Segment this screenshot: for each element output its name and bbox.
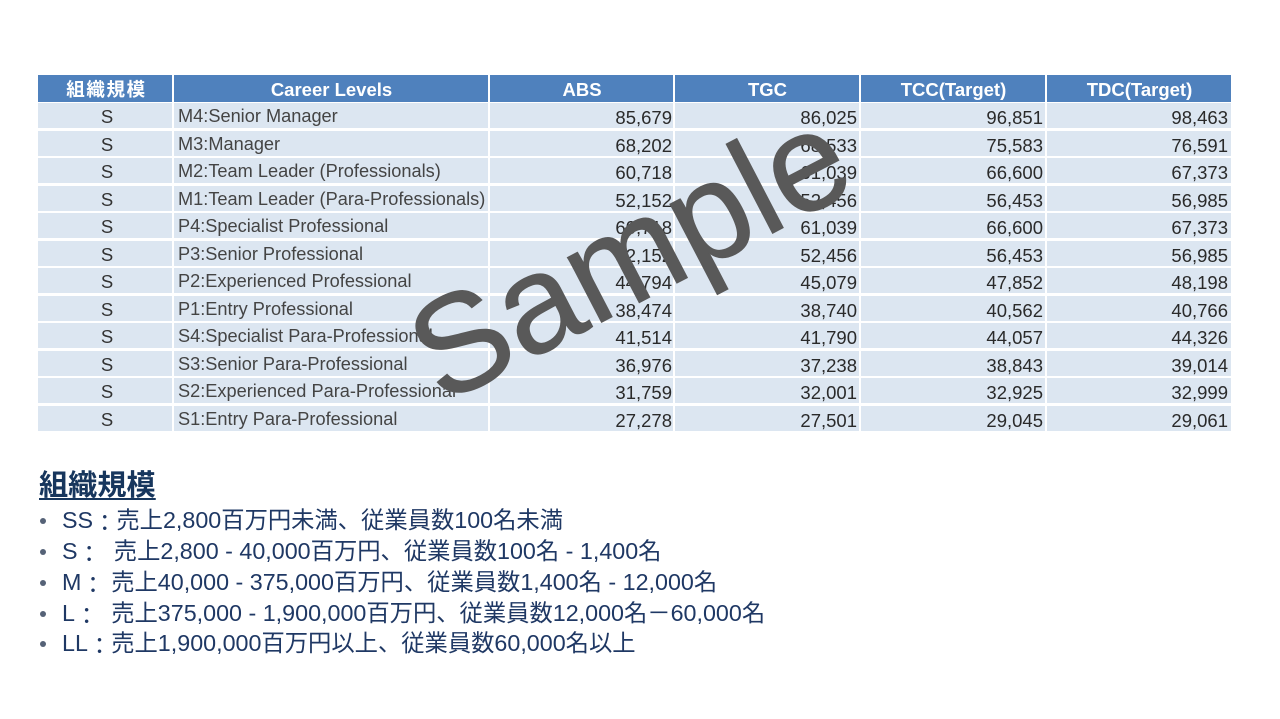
row: S1 <box>38 406 1231 431</box>
row: P3: 56,453 <box>986 244 1043 266</box>
row: S4: 44,057 <box>986 327 1043 348</box>
row: S1: S <box>101 408 113 430</box>
row: P1: 40,766 <box>1171 300 1228 320</box>
row: S3: S <box>101 354 113 374</box>
row: S1: 29,045 <box>986 410 1043 430</box>
table header row: Career Levels <box>271 79 392 100</box>
row: P4: P4:Specialist Professional <box>178 216 388 236</box>
row: P3: 56,985 <box>1171 244 1228 266</box>
row: P2 <box>38 268 1231 293</box>
row: M3: 75,583 <box>986 134 1043 156</box>
row: M3 <box>38 131 1231 156</box>
row: M3: 68,202 <box>615 134 672 156</box>
row: S2: 31,759 <box>615 382 672 403</box>
row: S4: 41,790 <box>800 327 857 348</box>
row: S1: S1:Entry Para-Professional <box>178 408 397 428</box>
row: M2: 60,718 <box>615 162 672 183</box>
row: P2: S <box>101 271 113 292</box>
row: M2: 61,039 <box>800 162 857 183</box>
row: S1: 27,278 <box>615 410 672 430</box>
row: P4 <box>38 213 1231 238</box>
row: M4 <box>38 103 1231 128</box>
row: P1: P1:Entry Professional <box>178 298 353 318</box>
row: P1: 40,562 <box>986 300 1043 320</box>
row: S4: 44,326 <box>1171 327 1228 348</box>
list item: L: L： 売上375,000 - 1,900,000百万円、従業員数12,000名－60,000名 <box>62 600 765 629</box>
list item: S: S： 売上2,800 - 40,000百万円、従業員数100名 - 1,400名 <box>62 538 661 567</box>
table header row: TDC(Target) <box>1087 79 1192 100</box>
row: M3: M3:Manager <box>178 134 280 154</box>
row: P4: S <box>101 216 113 237</box>
table header row: 組織規模 <box>66 79 147 100</box>
row: P4: 67,373 <box>1171 217 1228 238</box>
row: P2: 44,794 <box>615 272 672 293</box>
row: S4: S4:Specialist Para-Professional <box>178 326 433 346</box>
row: M4: S <box>101 106 113 127</box>
table header row: TCC(Target) <box>901 79 1006 100</box>
row: M2: M2:Team Leader (Professionals) <box>178 161 441 181</box>
row: M3: 76,591 <box>1171 134 1228 156</box>
row: M2: S <box>101 161 113 182</box>
row: P3: 52,152 <box>615 244 672 266</box>
watermark: Sample: Sample <box>384 77 874 432</box>
row: P2: 47,852 <box>986 272 1043 293</box>
row: P3: S <box>101 244 113 264</box>
row: S4: S <box>101 326 113 347</box>
row: M4: M4:Senior Manager <box>178 106 338 126</box>
row: P2: 48,198 <box>1171 272 1228 293</box>
row: S3 <box>38 351 1231 376</box>
table header row <box>38 75 1231 102</box>
row: S2: S <box>101 381 113 402</box>
list item: SS: SS：売上2,800百万円未満、従業員数100名未満 <box>62 507 563 536</box>
row: M1: M1:Team Leader (Para-Professionals) <box>178 188 485 208</box>
row: P3 <box>38 241 1231 266</box>
row: M1: 52,456 <box>800 190 857 210</box>
text block: organization size definitions <box>40 507 765 659</box>
row: S2: 32,999 <box>1171 382 1228 403</box>
row: P4: 61,039 <box>800 217 857 238</box>
row: S3: 39,014 <box>1171 354 1228 376</box>
row: P1 <box>38 296 1231 321</box>
row: P1: S <box>101 298 113 320</box>
row: P3: P3:Senior Professional <box>178 244 363 264</box>
row: S3: 36,976 <box>615 354 672 376</box>
row: M4: 85,679 <box>615 107 672 128</box>
row: S2: S2:Experienced Para-Professional <box>178 381 456 401</box>
row: P1: 38,740 <box>800 300 857 320</box>
row: S3: 37,238 <box>800 354 857 376</box>
row: S1: 29,061 <box>1171 410 1228 430</box>
row: S3: S3:Senior Para-Professional <box>178 354 407 374</box>
row: P3: 52,456 <box>800 244 857 266</box>
row: M4: 86,025 <box>800 107 857 128</box>
row: M2: 66,600 <box>986 162 1043 183</box>
row: S2: 32,925 <box>986 382 1043 403</box>
row: P4: 66,600 <box>986 217 1043 238</box>
row: S2: 32,001 <box>800 382 857 403</box>
row: M2: 67,373 <box>1171 162 1228 183</box>
row: M4: 96,851 <box>986 107 1043 128</box>
row: P4: 60,718 <box>615 217 672 238</box>
row: S4 <box>38 323 1231 348</box>
row: S1: 27,501 <box>800 410 857 430</box>
list item: M: M： 売上40,000 - 375,000百万円、従業員数1,400名 - 12,000名 <box>62 569 717 598</box>
table header row: TGC <box>748 79 787 100</box>
row: P2: P2:Experienced Professional <box>178 271 412 291</box>
panel: salary table <box>38 75 1231 431</box>
row: M3: 68,533 <box>800 134 857 156</box>
row: M4: 98,463 <box>1171 107 1228 128</box>
row: M1: 52,152 <box>615 190 672 210</box>
row: M2 <box>38 158 1231 183</box>
table header row: ABS <box>562 79 602 100</box>
row: M1: 56,985 <box>1171 190 1228 210</box>
row: P1: 38,474 <box>615 300 672 320</box>
row: M1 <box>38 186 1231 211</box>
row: M1: S <box>101 188 113 210</box>
row: P2: 45,079 <box>800 272 857 293</box>
row: S2 <box>38 378 1231 403</box>
row: M3: S <box>101 134 113 154</box>
row: M1: 56,453 <box>986 190 1043 210</box>
row: S4: 41,514 <box>615 327 672 348</box>
list item: LL: LL：売上1,900,000百万円以上、従業員数60,000名以上 <box>62 630 636 659</box>
row: S3: 38,843 <box>986 354 1043 376</box>
heading: organization size: 組織規模 <box>39 470 156 502</box>
